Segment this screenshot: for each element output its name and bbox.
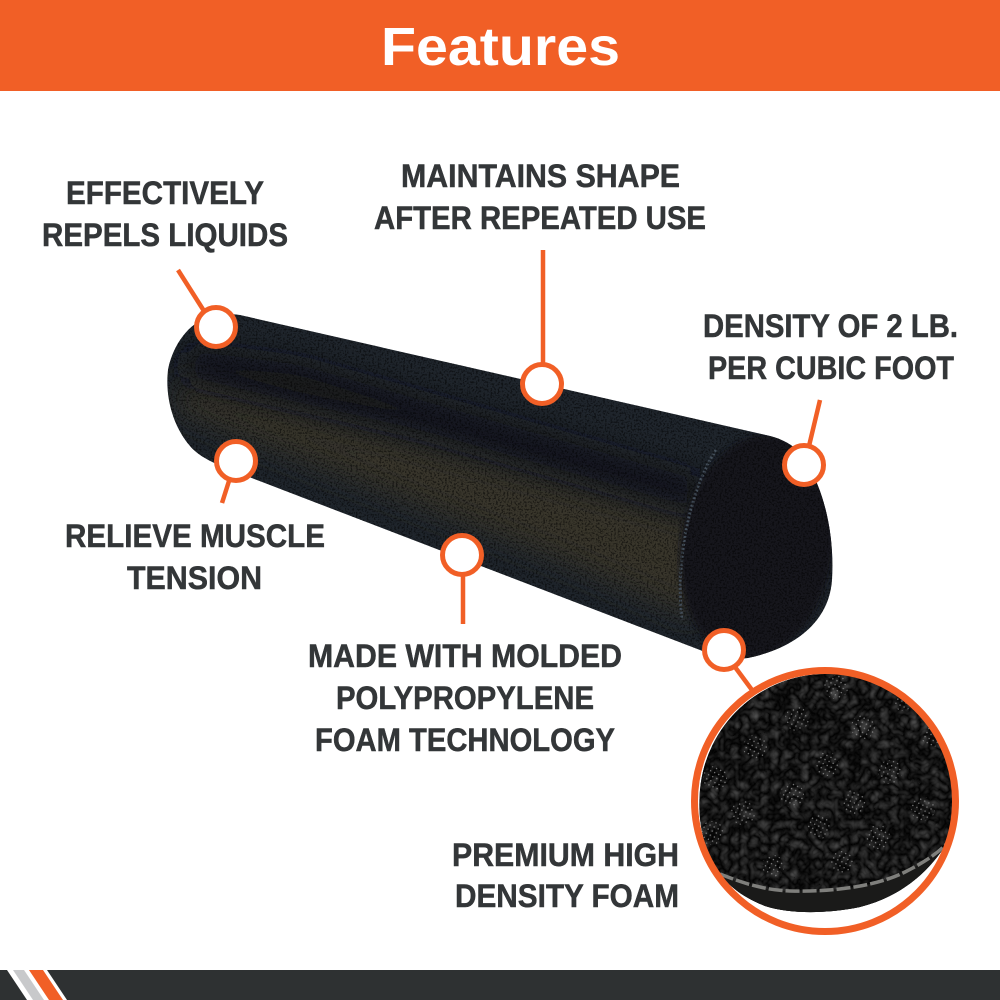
callout: density: PER CUBIC FOOT bbox=[708, 350, 954, 386]
magnified foam texture circle bbox=[694, 670, 956, 932]
callout: effectively repels liquids: EFFECTIVELY bbox=[66, 175, 264, 211]
callout: effectively repels liquids: REPELS LIQUIDS bbox=[42, 217, 288, 253]
callout: molded polypropylene bbox=[308, 536, 622, 758]
callout: relieve muscle tension bbox=[65, 442, 325, 596]
callout: density: DENSITY OF 2 LB. bbox=[703, 308, 958, 344]
callout: density bbox=[703, 308, 958, 484]
callout: molded polypropylene: FOAM TECHNOLOGY bbox=[315, 722, 615, 758]
callout: maintains shape bbox=[374, 158, 706, 404]
callout: molded polypropylene: POLYPROPYLENE bbox=[336, 680, 594, 716]
callout: effectively repels liquids bbox=[42, 175, 288, 346]
callout: maintains shape: MAINTAINS SHAPE bbox=[401, 158, 680, 194]
footer bar with stripes bbox=[0, 970, 1000, 1000]
foam lower side bbox=[728, 850, 942, 912]
foam cut edge bbox=[720, 840, 950, 891]
callout: maintains shape: AFTER REPEATED USE bbox=[374, 200, 706, 236]
callout: relieve muscle tension: RELIEVE MUSCLE bbox=[65, 518, 325, 554]
callout: premium high density foam: DENSITY FOAM bbox=[455, 878, 679, 914]
callout: relieve muscle tension: TENSION bbox=[127, 560, 262, 596]
callout: premium high density foam: PREMIUM HIGH bbox=[452, 837, 679, 873]
header banner bbox=[0, 0, 1000, 91]
foam roller product photo bbox=[167, 314, 832, 658]
callout: premium high density foam bbox=[452, 630, 752, 914]
callout: molded polypropylene: MADE WITH MOLDED bbox=[308, 638, 622, 674]
title: Features bbox=[381, 17, 620, 77]
dot clusters on foam surface bbox=[700, 675, 942, 877]
